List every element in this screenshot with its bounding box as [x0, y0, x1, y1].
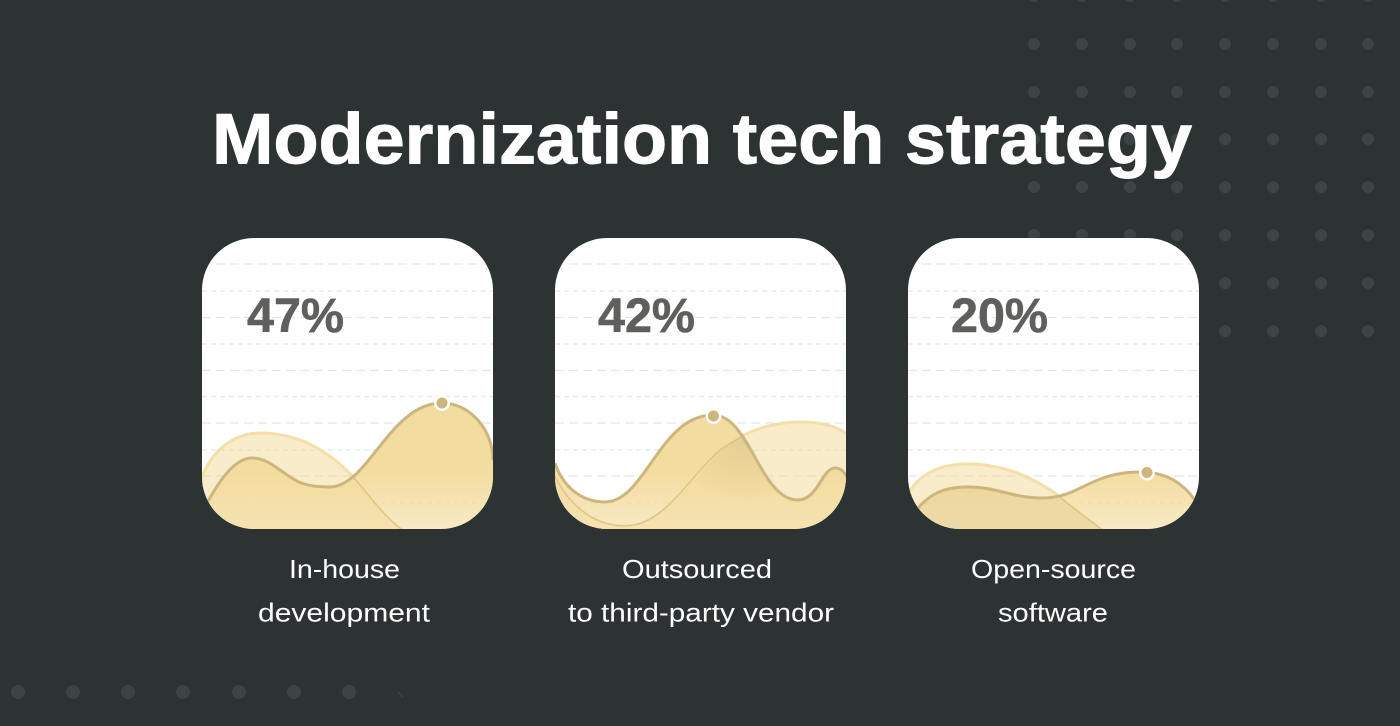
label: outsourced to third-party vendor	[568, 554, 834, 628]
label: in-house development: In-house	[289, 554, 400, 584]
value: 42%: 42%	[598, 290, 695, 343]
title: Modernization tech strategy	[212, 100, 1193, 180]
label: outsourced to third-party vendor: Outsourced	[622, 554, 772, 584]
panel: open-source	[900, 238, 1199, 540]
dot grid: top right	[1028, 0, 1374, 337]
label: open-source software: Open-source	[971, 554, 1136, 584]
area chart: 42%	[550, 264, 850, 540]
dot row: bottom left	[11, 685, 403, 699]
label: open-source software	[971, 554, 1136, 628]
marker: peak point	[1139, 464, 1155, 480]
marker: peak point	[434, 395, 450, 411]
card background	[555, 238, 846, 529]
value: 20%: 20%	[951, 290, 1048, 343]
area chart: 47%	[198, 264, 497, 540]
label: in-house development	[258, 554, 431, 628]
panel: in-house development	[198, 238, 497, 540]
label: in-house development: development	[258, 598, 431, 628]
value: 47%: 47%	[247, 290, 344, 343]
area chart: 20%	[900, 264, 1199, 540]
panel: outsourced	[550, 238, 850, 540]
card background	[202, 238, 493, 529]
marker: peak point	[706, 408, 722, 424]
card background	[908, 238, 1199, 529]
label: open-source software: software	[998, 598, 1108, 628]
label: outsourced to third-party vendor: to third-party vendor	[568, 598, 834, 628]
